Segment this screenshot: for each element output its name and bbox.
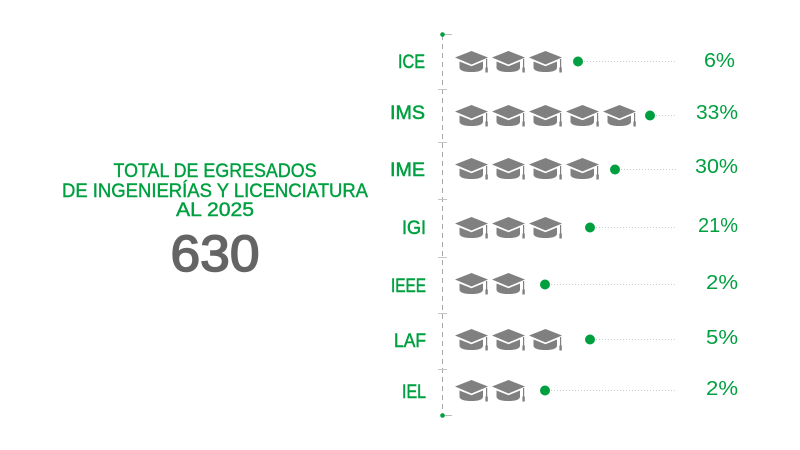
row: IEEE: IEEE (391, 276, 426, 297)
row: LAF: 5% (706, 327, 738, 349)
row: ICE: ICE (398, 52, 425, 73)
row: IMS: 33% (696, 102, 738, 124)
row: IEL: 2% (706, 378, 738, 400)
row: IME: 30% (695, 156, 738, 178)
row: IGI (402, 215, 738, 239)
total number: 630 (170, 225, 260, 282)
row: IMS (390, 102, 738, 126)
title: DE INGENIERÍAS Y LICENCIATURA (62, 181, 368, 202)
row: IEL (402, 378, 738, 403)
row: IME: IME (390, 160, 425, 181)
title (62, 161, 368, 221)
row: ICE (398, 50, 735, 73)
vertical axis (438, 32, 452, 418)
row: IMS: IMS (390, 103, 425, 124)
row: IME (390, 156, 738, 181)
row: ICE: 6% (704, 50, 735, 72)
title: TOTAL DE EGRESADOS (114, 161, 316, 182)
row: LAF (394, 327, 738, 352)
row: IGI: 21% (698, 215, 738, 237)
row: IGI: IGI (402, 218, 426, 239)
row: LAF: LAF (394, 331, 426, 352)
row: IEEE: 2% (706, 272, 738, 294)
row: IEL: IEL (402, 382, 426, 403)
row: IEEE (391, 272, 738, 297)
title: AL 2025 (176, 200, 254, 221)
